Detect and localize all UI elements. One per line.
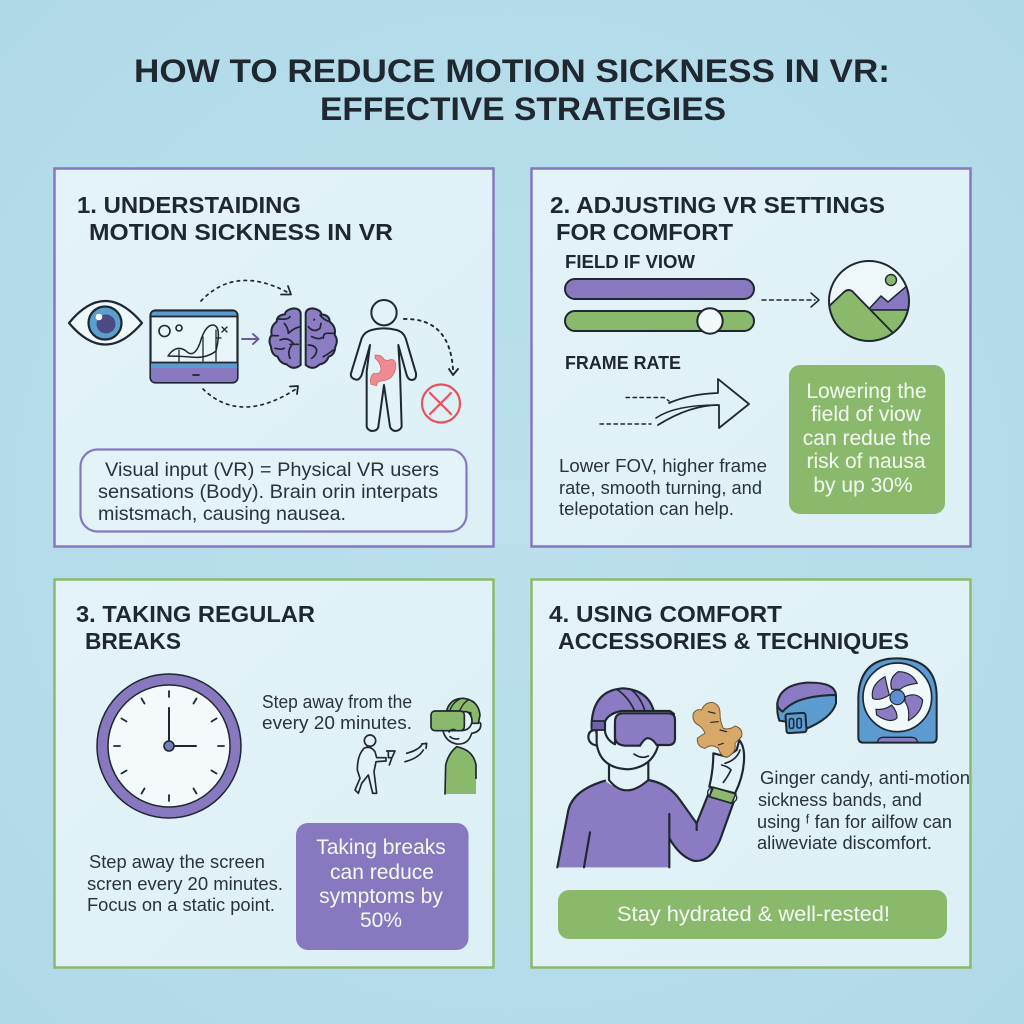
icon: eye [69,301,142,344]
slider: purple [565,279,754,299]
text: settings advice: Lower FOV, higher frame [559,455,767,476]
icon: brain [269,308,337,368]
arrow: screen to brain [242,334,258,344]
heading: adjusting settings [550,192,885,245]
text: step away top: Step away from the [262,692,412,712]
icon: anti-motion band [777,683,836,733]
text: step away lower: Step away the screen [89,851,265,872]
arrow: frame rate motion [600,379,749,428]
callout: breaks statistic [296,823,468,950]
text: step away lower: Focus on a static point. [87,894,275,915]
callout: explanation text [80,450,466,532]
heading: breaks: 3. TAKING REGULAR [76,601,315,627]
icon: clock [97,674,241,818]
icon: person in VR headset [431,698,481,794]
panel: adjusting VR settings [532,168,970,546]
text: accessories description: sickness bands, and [758,789,922,810]
arrow: dashed to landscape [762,293,819,307]
slider: green with knob [565,308,754,334]
icon: body with stomach [351,300,416,431]
title: HOW TO REDUCE MOTION SICKNESS IN VR: [134,53,890,89]
callout: stay hydrated [558,890,947,939]
text: settings advice: rate, smooth turning, and [559,477,762,498]
callout: breaks statistic: 50% [360,909,402,932]
arrow: dashed bottom curve [203,386,298,407]
icon: landscape circle [828,260,910,342]
callout: FOV statistic: field of viow [811,403,922,426]
heading: breaks [76,601,315,654]
callout: explanation text: Visual input (VR) = Physical VR users [105,459,439,481]
text: step away lower: scren every 20 minutes. [87,873,283,894]
heading: understanding: 1. UNDERSTAIDING [77,192,301,218]
arrow: dashed body to warning [404,319,458,375]
heading: accessories: ACCESSORIES & TECHNIQUES [558,628,909,654]
callout: breaks statistic: symptoms by [319,885,443,908]
heading: accessories: 4. USING COMFORT [549,601,783,627]
text: step away top: every 20 minutes. [262,713,412,733]
text: settings advice [559,455,767,519]
illustration: person with VR headset holding ginger [557,688,744,867]
callout: FOV statistic: can redue the [803,427,931,450]
text: settings advice: telepotation can help. [559,498,734,519]
text: accessories description [757,767,970,853]
heading: adjusting settings: 2. ADJUSTING VR SETTINGS [550,192,885,218]
callout: FOV statistic: Lowering the [806,380,927,403]
callout: explanation text: mistsmach, causing nausea. [98,503,346,525]
icon: warning X [422,384,460,422]
icon: walking person with controller [355,735,427,793]
callout: FOV statistic [789,365,945,514]
arrow: dashed top curve [201,280,291,301]
panel: comfort accessories [532,580,970,968]
text: step away lower [87,851,283,915]
title [134,53,890,127]
heading: understanding: MOTION SICKNESS IN VR [89,219,393,245]
heading: accessories [549,601,909,654]
heading: understanding [77,192,393,245]
callout: breaks statistic: can reduce [330,861,434,884]
callout: FOV statistic: by up 30% [813,474,913,497]
label: field of view: FIELD IF VIOW [565,252,695,272]
text: accessories description: Ginger candy, anti-motion [760,767,970,788]
icon: fan [858,658,937,743]
panel: understanding motion sickness [54,168,494,546]
callout: stay hydrated: Stay hydrated & well-rested! [617,903,890,926]
label: frame rate: FRAME RATE [565,353,681,373]
callout: breaks statistic: Taking breaks [316,836,446,859]
text: step away top [262,692,412,733]
text: accessories description: using ᶠ fan for ailfow can [757,811,952,832]
title: EFFECTIVE STRATEGIES [320,91,726,127]
panel: taking regular breaks [54,580,494,968]
heading: breaks: BREAKS [85,628,181,654]
icon: VR screen with rollercoaster [150,310,238,382]
callout: explanation text: sensations (Body). Brain orin interpats [98,481,438,503]
text: accessories description: aliweviate discomfort. [757,832,932,853]
callout: FOV statistic: risk of nausa [806,450,926,473]
heading: adjusting settings: FOR COMFORT [556,219,734,245]
